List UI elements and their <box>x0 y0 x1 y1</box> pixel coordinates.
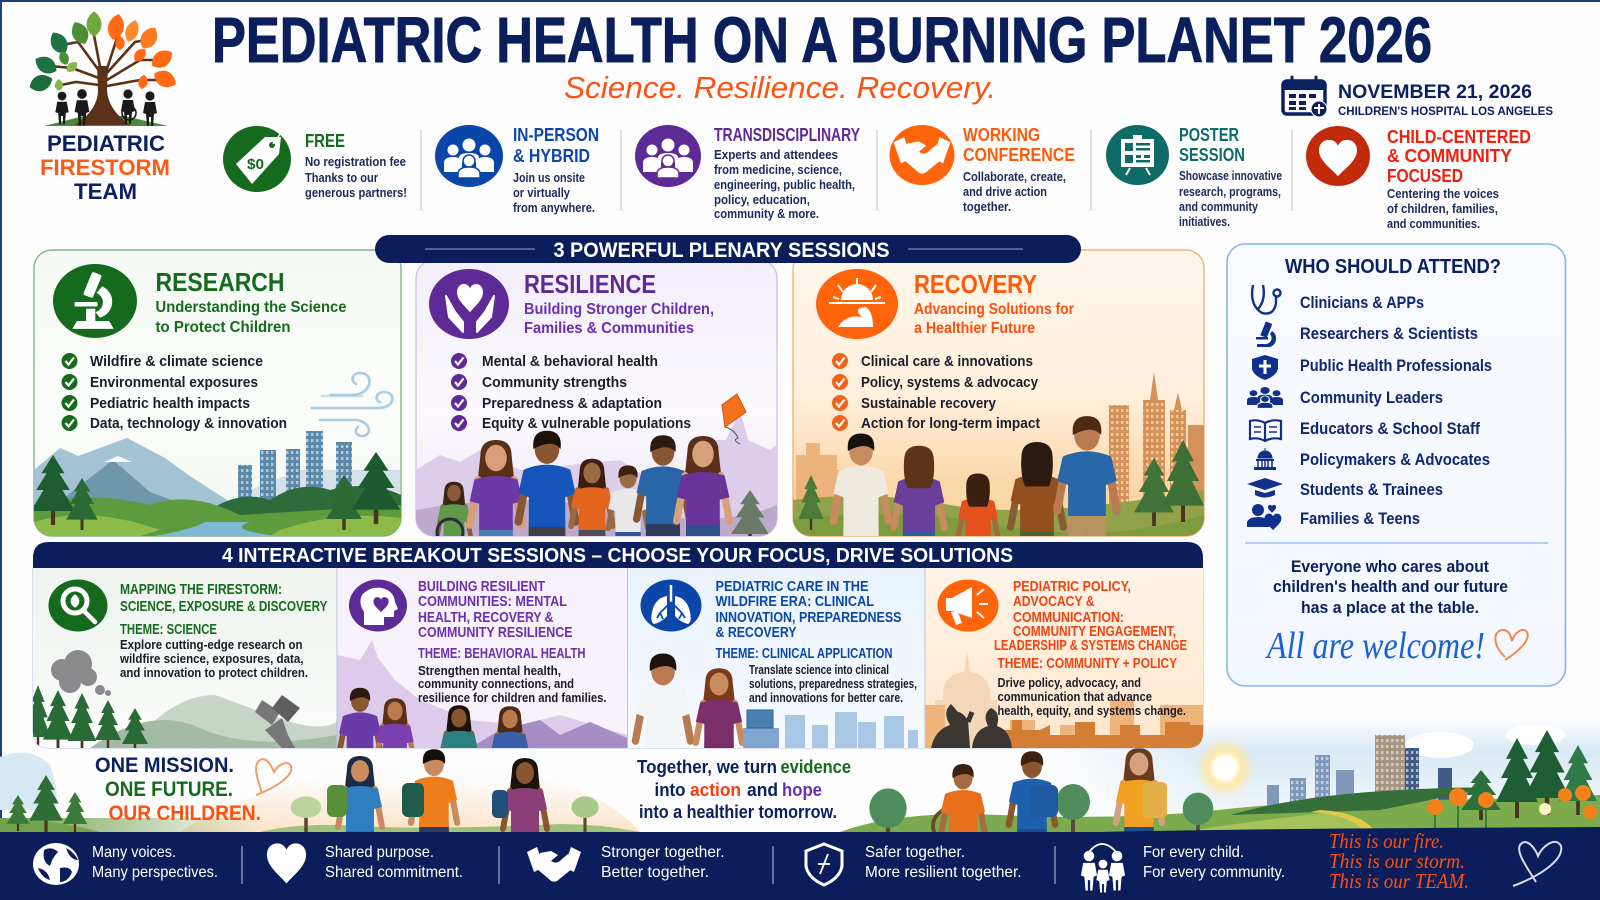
text <box>601 844 724 881</box>
footer: stronger together <box>527 844 724 882</box>
text: Stronger together. <box>601 844 724 861</box>
heading: IN-PERSON <box>513 124 599 145</box>
description <box>1387 186 1499 231</box>
welcome line: All are welcome! <box>1264 625 1485 667</box>
description: and communities. <box>1387 216 1480 231</box>
heading <box>1387 126 1531 186</box>
description: wildfire science, exposures, data, <box>119 652 304 666</box>
right scene: park and skyline <box>840 725 1600 832</box>
description: Showcase innovative <box>1179 168 1282 183</box>
feature: child-centered <box>1306 126 1531 231</box>
session title: INNOVATION, PREPAREDNESS <box>716 610 902 626</box>
description: Collaborate, create, <box>963 169 1066 184</box>
description <box>418 664 606 705</box>
feature: transdisciplinary <box>635 124 860 221</box>
icon: handshake <box>890 125 954 185</box>
description: communication that advance <box>998 690 1152 704</box>
audience list <box>1247 285 1492 530</box>
slogan: this is our team: This is our fire. <box>1329 829 1444 853</box>
resilience community illustration <box>416 416 777 536</box>
icon: heart <box>267 843 306 883</box>
text <box>92 844 218 881</box>
icon: megaphone <box>938 580 998 632</box>
slogan: this is our team: This is our TEAM. <box>1329 869 1469 893</box>
description <box>1179 168 1282 229</box>
message: together: Together, we turn <box>637 756 777 777</box>
description: Translate science into clinical <box>749 663 889 677</box>
closing message: children's health and our future <box>1273 577 1508 596</box>
checklist: Pediatric health impacts <box>90 395 250 412</box>
icon: microscope small <box>1256 321 1276 347</box>
session title <box>418 579 573 641</box>
slogan: one mission: ONE FUTURE. <box>105 778 233 801</box>
icon: price tag: $0 <box>247 156 264 173</box>
recovery skyline illustration <box>793 372 1204 536</box>
icon: shield <box>1252 355 1278 380</box>
slogan: this is our team: This is our storm. <box>1329 849 1465 873</box>
icon: stethoscope <box>1252 285 1280 314</box>
description: or virtually <box>513 185 571 200</box>
subtitle: Families & Communities <box>524 320 694 337</box>
panel: who should attend <box>1227 244 1566 686</box>
icon: handshake <box>527 847 581 882</box>
heading: RECOVERY <box>914 269 1037 299</box>
text: Shared purpose. <box>325 844 434 861</box>
session title: COMMUNITY ENGAGEMENT, <box>1013 624 1176 640</box>
icon: lungs <box>640 580 702 632</box>
closing message: has a place at the table. <box>1301 598 1479 617</box>
description: from medicine, science, <box>714 162 842 177</box>
label: Educators & School Staff <box>1300 420 1480 438</box>
description: Thanks to our <box>305 170 378 185</box>
text: Better together. <box>601 864 709 881</box>
theme: THEME: CLINICAL APPLICATION <box>716 646 892 662</box>
icon: community group <box>1247 387 1283 408</box>
breakout 3: pediatric care in the wildfire era <box>628 568 924 748</box>
icon: magnifier with leaf <box>48 580 108 632</box>
children in the park <box>931 748 1167 832</box>
session title <box>120 582 328 615</box>
heading: TRANSDISCIPLINARY <box>714 124 860 145</box>
session title: & RECOVERY <box>716 625 797 641</box>
subtitle: Understanding the Science <box>156 299 347 316</box>
slogan: one mission: ONE MISSION. <box>95 754 234 777</box>
footer: safer together <box>806 844 1022 885</box>
heading: WHO SHOULD ATTEND? <box>1285 256 1501 278</box>
date: NOVEMBER 21, 2026 <box>1338 81 1532 103</box>
description <box>998 676 1186 718</box>
description: Strengthen mental health, <box>418 664 561 678</box>
panel: recovery <box>792 249 1205 537</box>
icon: heart <box>1306 126 1370 186</box>
session title <box>716 579 902 641</box>
label: Clinicians & APPs <box>1300 294 1424 312</box>
breakout 2: building resilient communities <box>338 568 627 748</box>
description: Centering the voices <box>1387 186 1499 201</box>
icon: hand-drawn heart <box>1495 630 1528 660</box>
heading: SESSION <box>1179 144 1245 165</box>
checklist <box>451 353 691 432</box>
session title: BUILDING RESILIENT <box>418 579 545 595</box>
label: Families & Teens <box>1300 510 1420 528</box>
logo: Pediatric Firestorm Team <box>27 11 179 204</box>
subtitle <box>914 301 1074 337</box>
logo wordmark <box>40 131 170 204</box>
subtitle: to Protect Children <box>156 319 290 336</box>
heading: RESILIENCE <box>524 269 656 299</box>
logo wordmark: TEAM <box>74 179 137 204</box>
footer: for every child <box>1081 844 1285 892</box>
subtitle: a Healthier Future <box>914 320 1035 337</box>
background illustration: clinician and patient <box>628 568 924 748</box>
checklist: Clinical care & innovations <box>861 353 1033 370</box>
description <box>749 663 917 705</box>
icon: shield <box>806 844 842 885</box>
description <box>963 169 1066 214</box>
message: together: evidence <box>780 756 851 777</box>
description: health, equity, and systems change. <box>998 704 1186 718</box>
checklist: Preparedness & adaptation <box>482 395 662 412</box>
text: For every community. <box>1143 864 1285 881</box>
text: More resilient together. <box>865 864 1022 881</box>
icon: sunrise <box>816 269 898 339</box>
heading <box>1179 124 1245 165</box>
panel: breakout sessions <box>32 568 1204 748</box>
checklist: Sustainable recovery <box>861 395 997 412</box>
session title <box>994 579 1187 654</box>
description: of children, families, <box>1387 201 1498 216</box>
logo wordmark: FIRESTORM <box>40 155 170 180</box>
label: Policymakers & Advocates <box>1300 451 1490 469</box>
venue: CHILDREN'S HOSPITAL LOS ANGELES <box>1338 104 1553 118</box>
subtitle: Building Stronger Children, <box>524 301 714 318</box>
background illustration: capitol and skyline <box>925 568 1203 748</box>
footer: shared purpose <box>267 843 463 883</box>
icon: head with heart <box>349 580 407 632</box>
background illustration: forest, smoke and satellite <box>25 568 337 753</box>
heading: RESEARCH <box>156 267 284 297</box>
date and venue <box>1283 77 1553 118</box>
description: policy, education, <box>714 192 810 207</box>
checklist: Mental & behavioral health <box>482 353 658 370</box>
theme: THEME: SCIENCE <box>120 622 217 638</box>
message: together: hope <box>782 779 822 800</box>
feature: free <box>223 126 407 200</box>
left scene: trees and meadow <box>0 752 640 832</box>
icon: group <box>435 125 503 187</box>
label: Students & Trainees <box>1300 481 1443 499</box>
banner: plenary sessions <box>375 235 1081 263</box>
message: together: action <box>690 779 741 800</box>
icon: family <box>1081 844 1125 892</box>
description <box>119 638 308 680</box>
icon: hand-drawn heart <box>256 759 291 795</box>
heading <box>513 124 599 166</box>
background illustration: skyline and group <box>338 568 627 748</box>
text: For every child. <box>1143 844 1244 861</box>
subtitle <box>524 301 714 337</box>
session title: PEDIATRIC POLICY, <box>1013 579 1131 595</box>
icon: capitol <box>1254 448 1276 470</box>
description: from anywhere. <box>513 200 595 215</box>
breakout 1: mapping the firestorm <box>25 568 337 753</box>
heading: CHILD-CENTERED <box>1387 126 1531 147</box>
icon: hands holding heart <box>429 269 509 339</box>
heading: CONFERENCE <box>963 144 1075 165</box>
icon: kite <box>722 394 746 444</box>
icon: price tag <box>223 126 291 192</box>
feature: working conference <box>890 124 1075 214</box>
label: Public Health Professionals <box>1300 357 1492 375</box>
icon: wind <box>312 373 392 436</box>
slogan: this is our team <box>1329 829 1469 893</box>
icon: globe <box>33 843 79 885</box>
description <box>513 170 595 215</box>
checklist: Equity & vulnerable populations <box>482 415 691 432</box>
description: research, programs, <box>1179 184 1281 199</box>
icon: hand-drawn heart <box>1513 842 1561 886</box>
checklist: Action for long-term impact <box>861 415 1040 432</box>
description: and drive action <box>963 184 1047 199</box>
checklist: Environmental exposures <box>90 374 258 391</box>
description: and innovation to protect children. <box>120 666 308 680</box>
checklist: Community strengths <box>482 374 627 391</box>
feature: poster session <box>1106 124 1282 229</box>
theme: THEME: COMMUNITY + POLICY <box>998 656 1177 672</box>
icon: microscope <box>53 264 137 338</box>
description: engineering, public health, <box>714 177 855 192</box>
description: resilience for children and families. <box>418 691 606 705</box>
subtitle: Advancing Solutions for <box>914 301 1074 318</box>
description <box>714 147 855 221</box>
heading: FREE <box>305 130 345 151</box>
footer: many voices <box>33 843 218 885</box>
description: and innovations for better care. <box>749 691 903 705</box>
icon: graduation cap <box>1247 478 1283 498</box>
session title: WILDFIRE ERA: CLINICAL <box>716 594 874 610</box>
checklist: Wildfire & climate science <box>90 353 263 370</box>
label: Researchers & Scientists <box>1300 325 1478 343</box>
banner: plenary sessions: 3 POWERFUL PLENARY SESSIONS <box>554 239 890 262</box>
text <box>1143 844 1285 881</box>
closing message: Everyone who cares about <box>1291 557 1489 576</box>
icon: calendar <box>1283 77 1327 117</box>
description: together. <box>963 199 1011 214</box>
description: and community <box>1179 199 1259 214</box>
subtitle <box>156 299 347 336</box>
research landscape illustration <box>31 431 401 536</box>
session title: ADVOCACY & <box>1013 594 1095 610</box>
checklist <box>832 353 1040 432</box>
description: community connections, and <box>418 677 574 691</box>
description: Explore cutting-edge research on <box>120 638 302 652</box>
feature: in-person and hybrid <box>435 124 599 215</box>
message: together: into a healthier tomorrow. <box>639 801 837 822</box>
logo tree <box>27 11 179 126</box>
text <box>325 844 463 881</box>
text <box>865 844 1022 881</box>
heading: WORKING <box>963 124 1040 145</box>
panel: research <box>31 250 401 536</box>
checklist: Policy, systems & advocacy <box>861 374 1039 391</box>
logo children silhouettes <box>55 89 157 126</box>
icon: book <box>1250 420 1281 441</box>
description: initiatives. <box>1179 214 1230 229</box>
footer bar <box>0 827 1600 900</box>
closing message <box>1273 557 1508 617</box>
session title: SCIENCE, EXPOSURE & DISCOVERY <box>120 599 328 615</box>
description: Experts and attendees <box>714 147 838 162</box>
icon: family and heart <box>1247 504 1281 530</box>
bottom illustration band <box>0 725 1600 832</box>
checklist <box>62 353 287 432</box>
logo wordmark: PEDIATRIC <box>47 131 165 156</box>
session title: COMMUNICATION: <box>1013 610 1124 626</box>
text: Many perspectives. <box>92 864 218 881</box>
text: Shared commitment. <box>325 864 463 881</box>
icon: group <box>635 125 701 187</box>
heading: & COMMUNITY <box>1387 145 1513 166</box>
description: solutions, preparedness strategies, <box>749 677 917 691</box>
banner: breakout sessions <box>33 542 1203 568</box>
breakout 4: policy, advocacy, communication <box>925 568 1203 748</box>
session title: COMMUNITY RESILIENCE <box>418 625 573 641</box>
slogan: one mission: OUR CHILDREN. <box>108 802 261 825</box>
description: No registration fee <box>305 154 406 169</box>
banner: breakout sessions: 4 INTERACTIVE BREAKOUT SESSIONS – CHOOSE YOUR FOCUS, DRIVE SOLUTIONS <box>222 545 1013 567</box>
session title: PEDIATRIC CARE IN THE <box>716 579 869 595</box>
message: together: and <box>747 779 778 800</box>
description: generous partners! <box>305 185 407 200</box>
subtitle: Science. Resilience. Recovery. <box>564 70 996 105</box>
description: Drive policy, advocacy, and <box>998 676 1141 690</box>
heading: POSTER <box>1179 124 1239 145</box>
slogan: one mission <box>95 754 291 825</box>
description: community & more. <box>714 206 819 221</box>
checklist: Data, technology & innovation <box>90 415 287 432</box>
session title: LEADERSHIP & SYSTEMS CHANGE <box>994 638 1187 654</box>
message: together <box>637 756 851 822</box>
heading <box>963 124 1075 165</box>
text: Many voices. <box>92 844 176 861</box>
session title: MAPPING THE FIRESTORM: <box>120 582 282 598</box>
label: Community Leaders <box>1300 389 1443 407</box>
text: Safer together. <box>865 844 965 861</box>
theme: THEME: BEHAVIORAL HEALTH <box>418 646 586 662</box>
description: Join us onsite <box>513 170 585 185</box>
description <box>305 154 407 200</box>
icon: poster board <box>1106 125 1169 185</box>
panel: resilience <box>415 263 778 537</box>
walking children <box>327 749 550 832</box>
message: together: into <box>654 779 686 800</box>
session title: COMMUNITIES: MENTAL <box>418 594 567 610</box>
session title: HEALTH, RECOVERY & <box>418 610 554 626</box>
heading: & HYBRID <box>513 145 590 166</box>
heading: FOCUSED <box>1387 165 1463 186</box>
